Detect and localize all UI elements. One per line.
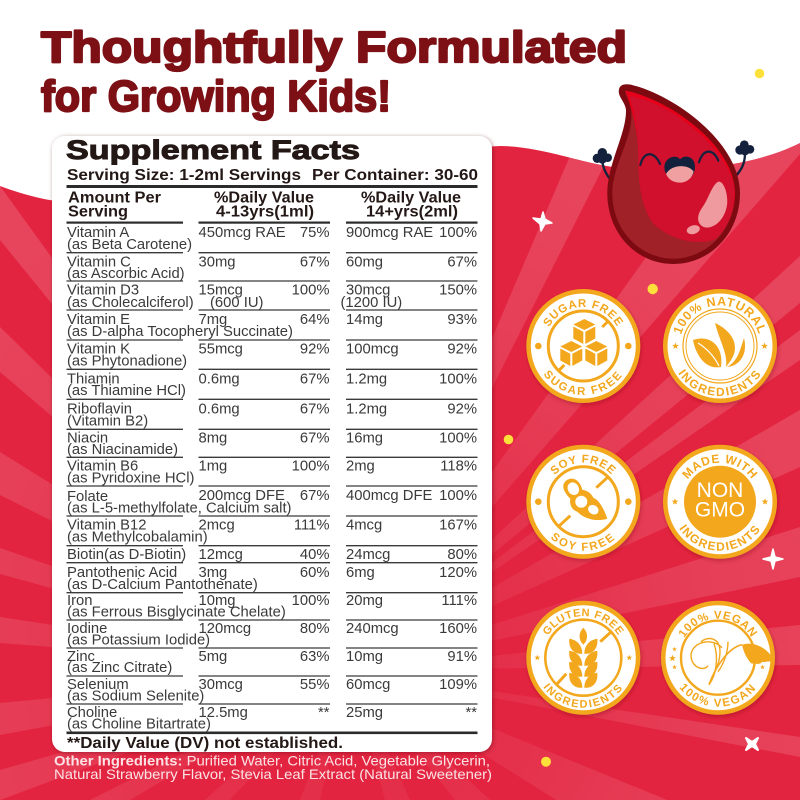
row: Zinc: 5mg bbox=[198, 649, 227, 665]
row: Vitamin E: 64% bbox=[300, 312, 330, 328]
row: Folate: 400mcg DFE bbox=[346, 488, 432, 504]
row: Vitamin K bbox=[67, 342, 477, 370]
row: Vitamin B12: 111% bbox=[294, 518, 330, 534]
row: Vitamin K: Vitamin K bbox=[67, 342, 130, 358]
row: Vitamin A bbox=[67, 225, 477, 253]
row: Zinc: 91% bbox=[447, 649, 477, 665]
title bbox=[41, 23, 627, 121]
icon: cheering blood drop mascot bbox=[593, 84, 754, 264]
badge: sugar free: SUGAR FREE bbox=[544, 299, 624, 326]
row: Pantothenic Acid: Pantothenic Acid bbox=[67, 565, 177, 581]
row: Zinc: 63% bbox=[300, 649, 330, 665]
row: Choline: Choline bbox=[67, 705, 117, 721]
row: Niacin: (as Niacinamide) bbox=[67, 442, 178, 458]
row: Zinc: Zinc bbox=[67, 649, 96, 665]
row: Vitamin D3 bbox=[67, 282, 477, 311]
row: Iron: 10mg bbox=[198, 593, 236, 609]
row: Pantothenic Acid: 3mg bbox=[198, 565, 227, 581]
row: Biotin: 24mcg bbox=[346, 547, 390, 563]
badge: soy free: SOY FREE bbox=[550, 454, 616, 474]
row: Pantothenic Acid: (as D-Calcium Pantothenate) bbox=[67, 577, 258, 593]
row: Iron: 20mg bbox=[346, 593, 383, 609]
row: Folate: 67% bbox=[300, 488, 330, 504]
row: Riboflavin: 0.6mg bbox=[198, 402, 240, 418]
badge: 100% vegan: 100% VEGAN bbox=[679, 610, 758, 638]
badge: soy free bbox=[526, 444, 643, 562]
badge: 100% natural ingredients: INGREDIENTS bbox=[678, 369, 760, 396]
row: Vitamin A: 450mcg RAE bbox=[198, 225, 286, 241]
row: Folate: 200mcg DFE bbox=[198, 488, 285, 504]
row: Iodine: 120mcg bbox=[198, 621, 251, 637]
row: Vitamin E bbox=[67, 312, 477, 340]
panel: supplement facts card bbox=[52, 135, 492, 752]
row: Vitamin A: 900mcg RAE bbox=[346, 225, 433, 241]
row: Vitamin B6: (as Pyridoxine HCl) bbox=[67, 470, 195, 486]
badge: gluten free ingredients: INGREDIENTS bbox=[543, 683, 622, 708]
row: Niacin: 100% bbox=[439, 430, 477, 446]
badge: made with non GMO ingredients: MADE WITH bbox=[682, 454, 758, 479]
badge: soy free: SOY FREE bbox=[551, 533, 615, 551]
badge: sugar free: SUGAR FREE bbox=[544, 370, 622, 396]
table column headers: 14+yrs(2ml) bbox=[366, 204, 458, 220]
row: Vitamin D3: 30mcg bbox=[346, 282, 390, 298]
row: Selenium: 55% bbox=[300, 677, 330, 693]
table column headers bbox=[68, 190, 461, 220]
badge: 100% vegan: 100% VEGAN bbox=[680, 684, 756, 707]
row: Vitamin K: 100mcg bbox=[346, 342, 399, 358]
serving size line: Per Container: 30-60 bbox=[312, 167, 478, 184]
row: Choline: ** bbox=[318, 705, 330, 721]
row: Vitamin B6: 118% bbox=[440, 458, 477, 474]
row: Iodine: 240mcg bbox=[346, 621, 399, 637]
row: Thiamin: 100% bbox=[439, 372, 477, 388]
row: Vitamin B12: (as Methylcobalamin) bbox=[67, 530, 208, 546]
row: Pantothenic Acid bbox=[67, 565, 477, 593]
row: Selenium: 60mcg bbox=[346, 677, 390, 693]
row: Niacin: 8mg bbox=[198, 430, 227, 446]
row: Biotin: Biotin(as D-Biotin) bbox=[67, 547, 186, 563]
row: Riboflavin: 1.2mg bbox=[346, 402, 387, 418]
row: Vitamin E: 14mg bbox=[346, 312, 383, 328]
row: Pantothenic Acid: 60% bbox=[300, 565, 330, 581]
row: Niacin: Niacin bbox=[67, 430, 108, 446]
row: Vitamin A: (as Beta Carotene) bbox=[67, 237, 192, 253]
row: Vitamin D3: 150% bbox=[439, 282, 477, 298]
row: Vitamin B6: Vitamin B6 bbox=[67, 458, 138, 474]
row: Vitamin A: Vitamin A bbox=[67, 225, 129, 241]
row: Vitamin A: 100% bbox=[439, 225, 477, 241]
row: Pantothenic Acid: 6mg bbox=[346, 565, 375, 581]
row: Zinc: (as Zinc Citrate) bbox=[67, 660, 172, 676]
row: Vitamin B6: 2mg bbox=[346, 458, 375, 474]
row: Riboflavin: 67% bbox=[300, 402, 330, 418]
badge: sugar free bbox=[526, 289, 643, 406]
row: Vitamin D3: (1200 IU) bbox=[340, 295, 402, 311]
row: Vitamin B6 bbox=[67, 458, 477, 486]
row: Iron: (as Ferrous Bisglycinate Chelate) bbox=[67, 604, 286, 620]
row: Vitamin C: 30mg bbox=[198, 254, 236, 270]
row: Riboflavin: 92% bbox=[447, 402, 477, 418]
row: Vitamin C: (as Ascorbic Acid) bbox=[67, 266, 185, 282]
row: Folate: 100% bbox=[439, 488, 477, 504]
row: Selenium: (as Sodium Selenite) bbox=[67, 688, 204, 704]
row: Thiamin bbox=[67, 372, 477, 399]
badge: made with non GMO ingredients: GMO bbox=[695, 499, 745, 522]
badge: 100% natural ingredients: 100% NATURAL bbox=[674, 296, 765, 334]
row: Biotin bbox=[67, 547, 477, 563]
badge: gluten free ingredients: GLUTEN FREE bbox=[543, 608, 624, 635]
badge: made with non GMO ingredients bbox=[662, 444, 780, 562]
row: Zinc: 10mg bbox=[346, 649, 383, 665]
table column headers: Amount Per bbox=[68, 190, 161, 206]
table column headers: %Daily Value bbox=[361, 190, 461, 206]
title: for Growing Kids! bbox=[41, 72, 391, 121]
decorative dots and sparkles bbox=[504, 69, 783, 767]
badge: gluten free ingredients bbox=[526, 600, 643, 718]
row: Iron: 111% bbox=[441, 593, 477, 609]
row: Iodine: 80% bbox=[300, 621, 330, 637]
row: Vitamin C: Vitamin C bbox=[67, 254, 131, 270]
row: Vitamin D3: 100% bbox=[292, 282, 330, 298]
row: Vitamin C: 60mg bbox=[346, 254, 383, 270]
table column headers: Serving bbox=[68, 204, 128, 220]
other ingredients text bbox=[54, 754, 492, 782]
badge: 100% vegan bbox=[660, 600, 778, 718]
row: Vitamin D3: Vitamin D3 bbox=[67, 282, 139, 298]
row: Vitamin E: (as D-alpha Tocopheryl Succinate) bbox=[67, 324, 293, 340]
row: Thiamin: 67% bbox=[300, 372, 330, 388]
row: Choline: 12.5mg bbox=[198, 705, 248, 721]
row: Thiamin: (as Thiamine HCl) bbox=[67, 383, 186, 399]
row: Vitamin E: 93% bbox=[447, 312, 477, 328]
other ingredients text: Natural Strawberry Flavor, Stevia Leaf Extract (Natural Sweetener) bbox=[54, 767, 492, 782]
footnote: **Daily Value (DV) not established. bbox=[67, 735, 343, 752]
row: Riboflavin: Riboflavin bbox=[67, 402, 132, 418]
row: Biotin: 12mcg bbox=[198, 547, 243, 563]
row: Iron: Iron bbox=[67, 593, 92, 609]
row: Niacin bbox=[67, 430, 477, 458]
row: Vitamin B6: 100% bbox=[292, 458, 330, 474]
row: Vitamin B12: Vitamin B12 bbox=[67, 518, 147, 534]
row: Riboflavin bbox=[67, 402, 477, 430]
row: Iron bbox=[67, 593, 477, 620]
row: Folate bbox=[67, 488, 477, 516]
row: Selenium: 109% bbox=[439, 677, 477, 693]
row: Choline bbox=[67, 705, 477, 732]
badge: made with non GMO ingredients: INGREDIENTS bbox=[679, 524, 760, 551]
row: Vitamin B6: 1mg bbox=[198, 458, 227, 474]
row: Vitamin C bbox=[67, 254, 477, 282]
row: Folate: Folate bbox=[67, 489, 108, 505]
row: Choline: 25mg bbox=[346, 705, 383, 721]
row: Selenium: Selenium bbox=[67, 677, 129, 693]
row: Thiamin: Thiamin bbox=[67, 372, 120, 388]
row: Vitamin B12: 2mcg bbox=[198, 518, 235, 534]
row: Riboflavin: (Vitamin B2) bbox=[67, 414, 148, 430]
row: Biotin: 40% bbox=[300, 547, 330, 563]
badge: made with non GMO ingredients: NON bbox=[697, 479, 743, 502]
row: Choline: (as Choline Bitartrate) bbox=[67, 716, 211, 732]
row: Vitamin K: 92% bbox=[300, 342, 330, 358]
other ingredients text: Other Ingredients: Purified Water, Citric Acid, Vegetable Glycerin, bbox=[54, 754, 490, 768]
row: Niacin: 16mg bbox=[346, 430, 383, 446]
row: Selenium bbox=[67, 677, 477, 704]
row: Vitamin C: 67% bbox=[300, 254, 330, 270]
row: Iodine bbox=[67, 621, 477, 648]
row: Niacin: 67% bbox=[300, 430, 330, 446]
row: Vitamin K: (as Phytonadione) bbox=[67, 354, 187, 370]
row: Vitamin K: 92% bbox=[447, 342, 477, 358]
row: Thiamin: 0.6mg bbox=[198, 372, 240, 388]
table column headers: %Daily Value bbox=[214, 190, 314, 206]
row: Vitamin B12 bbox=[67, 518, 477, 546]
title: Thoughtfully Formulated bbox=[41, 23, 627, 72]
row: Vitamin B12: 4mcg bbox=[346, 518, 382, 534]
row: Vitamin D3: (as Cholecalciferol) bbox=[67, 295, 194, 311]
serving size line: Serving Size: 1-2ml Servings bbox=[67, 167, 301, 184]
row: Vitamin A: 75% bbox=[300, 225, 330, 241]
row: Folate: (as L-5-methylfolate, Calcium salt) bbox=[67, 500, 292, 516]
row: Pantothenic Acid: 120% bbox=[439, 565, 477, 581]
serving size line bbox=[67, 167, 478, 184]
row: Vitamin D3: 15mcg bbox=[198, 282, 243, 298]
row: Iodine: Iodine bbox=[67, 621, 107, 637]
row: Iron: 100% bbox=[292, 593, 330, 609]
badge: 100% natural ingredients bbox=[662, 289, 780, 406]
row: Vitamin C: 67% bbox=[447, 254, 477, 270]
row: Choline: ** bbox=[465, 705, 477, 721]
row: Vitamin E: 7mg bbox=[198, 312, 227, 328]
heading: Supplement Facts: Supplement Facts bbox=[66, 135, 360, 165]
row: Selenium: 30mcg bbox=[198, 677, 243, 693]
row: Biotin: 80% bbox=[447, 547, 477, 563]
row: Vitamin B12: 167% bbox=[439, 518, 477, 534]
row: Zinc bbox=[67, 649, 477, 676]
row: Iodine: (as Potassium Iodide) bbox=[67, 632, 210, 648]
row: Thiamin: 1.2mg bbox=[346, 372, 387, 388]
table column headers: 4-13yrs(1ml) bbox=[216, 204, 314, 220]
row: Vitamin E: Vitamin E bbox=[67, 312, 130, 328]
row: Vitamin K: 55mcg bbox=[198, 342, 243, 358]
row: Iodine: 160% bbox=[439, 621, 477, 637]
row: Vitamin D3: (600 IU) bbox=[210, 295, 264, 311]
